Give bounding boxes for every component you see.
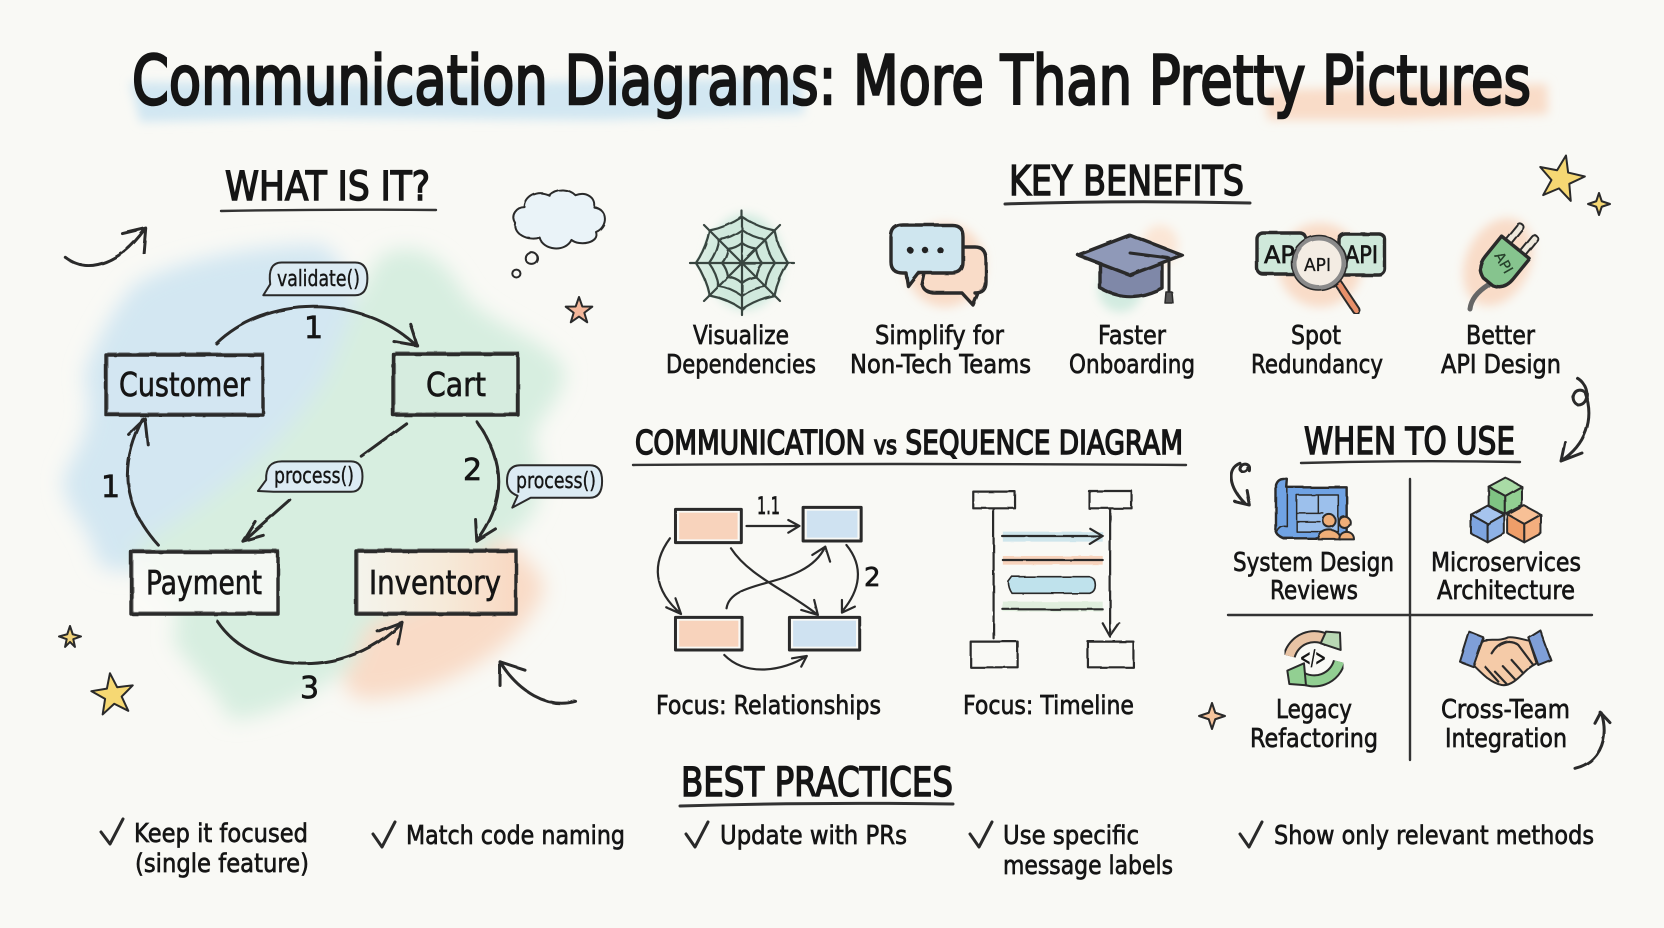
- icon: graduation cap: [1078, 225, 1182, 312]
- label: microservices architecture: Architecture: [1437, 576, 1575, 606]
- label: simplify for non-tech teams: [850, 321, 1031, 380]
- icon: api magnifier: API: [1264, 241, 1302, 269]
- icon: handshake: [1460, 630, 1551, 685]
- practice: keep it focused: [101, 819, 309, 879]
- label: visualize dependencies: Visualize: [693, 321, 789, 351]
- panel: communication vs sequence: [633, 423, 1186, 721]
- label: microservices architecture: Microservices: [1431, 548, 1581, 578]
- icon: microservice cubes: [1471, 478, 1541, 542]
- message numbers: 3: [300, 671, 319, 706]
- icon: spider web: [690, 211, 794, 315]
- practice: update with prs: Update with PRs: [720, 821, 907, 851]
- bubble: validate: validate(): [277, 267, 360, 292]
- heading: best practices: BEST PRACTICES: [681, 760, 953, 806]
- communication diagram arrows: [127, 307, 499, 664]
- watercolor wash: [63, 245, 565, 719]
- icon: api magnifier: [1257, 223, 1385, 310]
- practice: use specific labels: message labels: [1003, 851, 1173, 881]
- label: legacy refactoring: [1250, 695, 1378, 754]
- icon: refactoring cycle: [1287, 632, 1341, 685]
- icon: blueprint with team: [1276, 479, 1354, 539]
- label: cross-team integration: Cross-Team: [1441, 695, 1570, 725]
- label: simplify for non-tech teams: Simplify for: [875, 321, 1004, 351]
- heading: communication vs sequence: COMMUNICATION vs SEQUENCE DIAGRAM: [635, 423, 1183, 462]
- label: visualize dependencies: [666, 321, 816, 380]
- icon: chat bubbles: [891, 223, 986, 307]
- bubble: process to inventory: process(): [516, 469, 596, 494]
- object: inventory: Inventory: [369, 563, 501, 602]
- panel: when to use: [1199, 420, 1610, 768]
- curly arrow: [1561, 378, 1589, 461]
- object: inventory: [356, 549, 517, 614]
- label: simplify for non-tech teams: Non-Tech Teams: [850, 350, 1031, 380]
- label: microservices architecture: [1431, 548, 1581, 606]
- label: focus timeline: Focus: Timeline: [963, 691, 1134, 721]
- icon: orange star: [566, 297, 592, 322]
- message numbers: 2: [463, 453, 482, 488]
- icon: api magnifier: API: [1304, 255, 1331, 276]
- panel: key benefits: [666, 151, 1610, 380]
- practice: keep it focused: (single feature): [135, 849, 309, 879]
- icon: api plug: API: [1491, 250, 1515, 277]
- icon: thought cloud: [512, 190, 605, 277]
- object: customer: Customer: [119, 365, 250, 404]
- heading: what is it: WHAT IS IT?: [225, 164, 430, 210]
- label: faster onboarding: Faster: [1098, 321, 1166, 351]
- label: cross-team integration: Integration: [1445, 724, 1567, 754]
- curl arrow: [1231, 463, 1250, 505]
- icon: gold star: [89, 670, 136, 716]
- communication mini diagram: [658, 492, 881, 670]
- sequence mini diagram: [971, 491, 1133, 667]
- icon: gold star top right: [1535, 151, 1588, 203]
- communication mini diagram: 2: [864, 563, 881, 593]
- label: faster onboarding: Onboarding: [1069, 350, 1195, 380]
- object: payment: Payment: [146, 563, 262, 602]
- label: legacy refactoring: Legacy: [1276, 695, 1352, 725]
- label: spot redundancy: Spot: [1291, 321, 1341, 351]
- icon: small gold star: [59, 626, 81, 647]
- message numbers: [101, 311, 482, 706]
- object: customer: [106, 353, 264, 415]
- bubble: process to payment: process(): [274, 464, 354, 489]
- label: system design reviews: [1233, 548, 1394, 606]
- label: spot redundancy: [1251, 321, 1383, 380]
- decorative arrow bottom right: [500, 662, 576, 703]
- panel: best practices: [101, 760, 1594, 881]
- icon: orange sparkle: [1199, 703, 1225, 729]
- heading: key benefits: KEY BENEFITS: [1009, 157, 1244, 205]
- object: cart: [393, 352, 519, 415]
- label: better api design: API Design: [1441, 350, 1561, 380]
- icon: api magnifier: API: [1345, 241, 1378, 269]
- practice: use specific labels: [970, 821, 1173, 881]
- message numbers: 1: [101, 470, 120, 505]
- icon: api plug: [1450, 207, 1546, 317]
- message numbers: 1: [304, 311, 323, 346]
- object: cart: Cart: [426, 365, 486, 404]
- decorative arrow top left: [65, 228, 146, 266]
- practice: match code naming: Match code naming: [406, 821, 625, 851]
- label: system design reviews: System Design: [1233, 548, 1394, 578]
- object: payment: [131, 550, 279, 614]
- icon: refactoring cycle: </>: [1300, 646, 1326, 670]
- label: visualize dependencies: Dependencies: [666, 350, 816, 380]
- label: spot redundancy: Redundancy: [1251, 350, 1383, 380]
- label: faster onboarding: [1069, 321, 1195, 380]
- label: better api design: [1441, 321, 1561, 380]
- bubble: validate: [263, 262, 367, 295]
- label: better api design: Better: [1466, 321, 1535, 351]
- label: cross-team integration: [1441, 695, 1570, 754]
- communication mini diagram: 1.1: [757, 492, 780, 520]
- label: legacy refactoring: Refactoring: [1250, 724, 1378, 754]
- bubble: process to payment: [258, 461, 362, 492]
- practice: relevant methods: Show only relevant methods: [1274, 821, 1594, 851]
- panel: what is it: [59, 164, 605, 719]
- label: system design reviews: Reviews: [1270, 576, 1358, 606]
- icon: small sparkle top right: [1588, 193, 1610, 215]
- heading: when to use: WHEN TO USE: [1304, 420, 1515, 463]
- quadrant dividers: [1228, 479, 1592, 760]
- practice: use specific labels: Use specific: [1003, 821, 1139, 851]
- practice: keep it focused: Keep it focused: [134, 819, 308, 849]
- arrow: bottom right: [1575, 713, 1610, 768]
- label: focus relationships: Focus: Relationships: [656, 691, 881, 721]
- bubble: process to inventory: [507, 465, 602, 508]
